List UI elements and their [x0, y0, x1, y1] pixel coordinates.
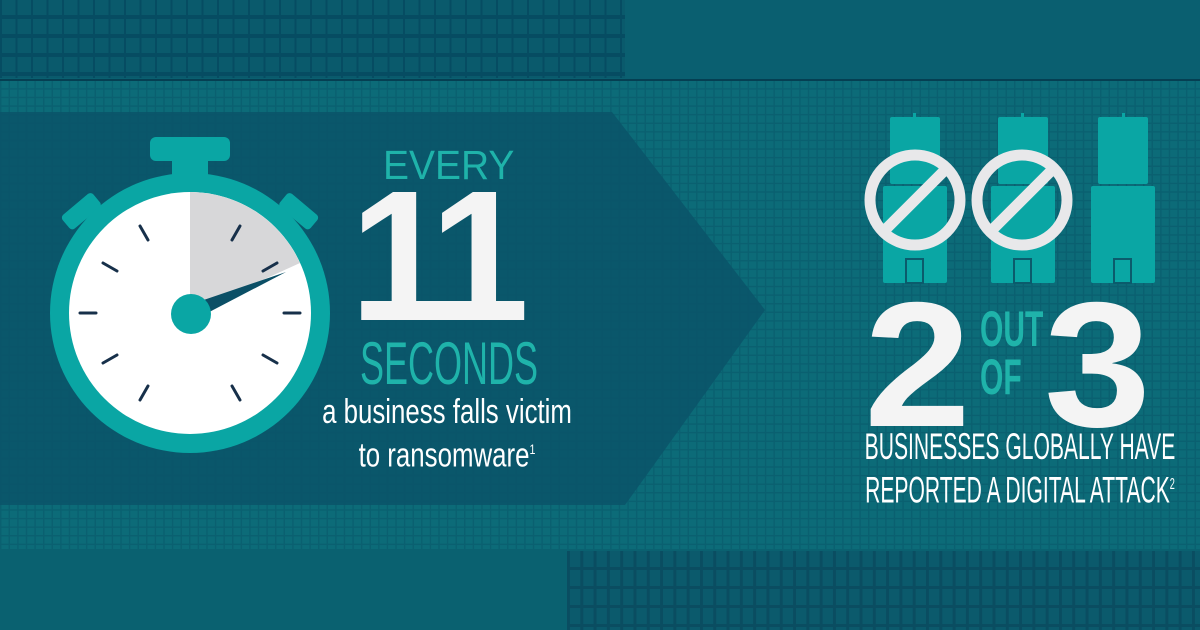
text: OUT OF: OUT: [980, 301, 1043, 357]
middle band: [0, 79, 1200, 549]
text: caption left: to ransomware1: [359, 436, 535, 474]
top right block: [625, 0, 1200, 78]
text: OUT OF: [980, 301, 1043, 405]
top band: [0, 0, 625, 78]
text: SECONDS: SECONDS: [360, 330, 538, 397]
stopwatch: [50, 137, 330, 453]
text: caption left: a business falls victim: [322, 393, 572, 431]
batteries: [864, 113, 1155, 284]
text: caption right: [865, 426, 1175, 510]
bottom band: [0, 549, 1200, 630]
text: 11: 11: [350, 153, 520, 360]
text: caption right: BUSINESSES GLOBALLY HAVE: [865, 426, 1175, 467]
text: 3: 3: [1044, 265, 1151, 464]
text: 2: 2: [864, 265, 971, 464]
text: caption left: [322, 393, 572, 474]
text: caption right: REPORTED A DIGITAL ATTACK2: [865, 469, 1175, 510]
text: EVERY: EVERY: [383, 142, 514, 188]
text: OUT OF: OF: [980, 349, 1022, 405]
bottom right grid: [567, 551, 1200, 630]
